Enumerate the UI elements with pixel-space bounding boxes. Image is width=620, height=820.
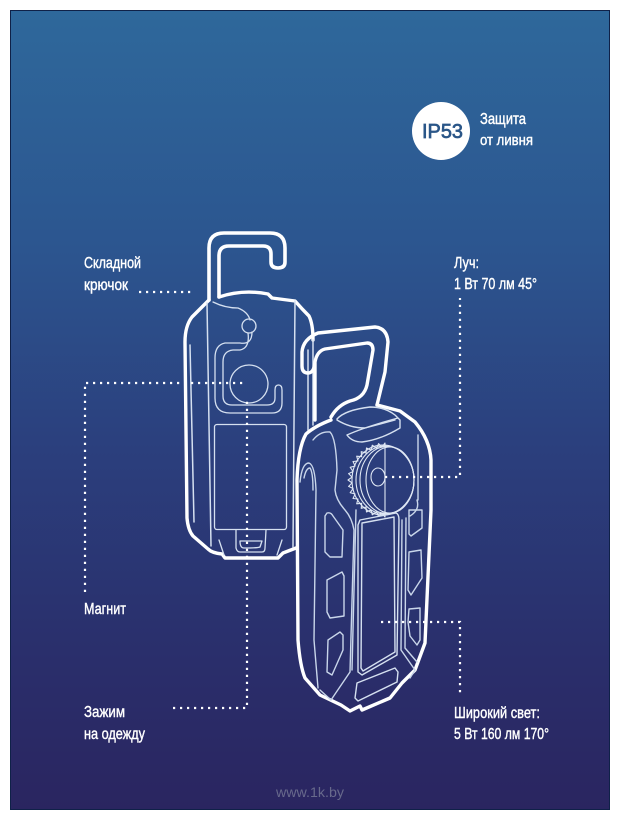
hook: front device: [302, 327, 388, 420]
callout: hook: Складной: [84, 255, 141, 272]
folded hook: rear device: [213, 302, 282, 413]
callout: beam: Луч:: [454, 255, 479, 272]
battery panel: rear device: [214, 424, 286, 530]
top cap: front device: [337, 407, 400, 442]
callout: wide light: Широкий свет:: [454, 705, 540, 722]
body outline: front device: [297, 405, 431, 711]
callout: beam: 1 Вт 70 лм 45°: [454, 276, 537, 293]
callout: magnet: Магнит: [84, 601, 127, 618]
badge label: IP53: [422, 121, 463, 143]
side grips: left: [325, 513, 344, 675]
badge: IP53: [412, 102, 470, 160]
label: rain protection: Защита: [480, 111, 526, 128]
knob rings: [366, 447, 414, 513]
bottom plate: [355, 668, 398, 701]
wide-light panel: [358, 513, 399, 675]
callout: clip: Зажим: [84, 704, 125, 721]
label: rain protection: [480, 111, 533, 149]
body contour lines: front device: [300, 432, 418, 700]
lens: [371, 468, 385, 486]
device: rear view: [185, 233, 313, 558]
callout: beam: [385, 255, 537, 477]
knob teeth: [348, 443, 385, 517]
body outline: rear device: [185, 292, 313, 558]
hook: rear device: [209, 233, 285, 300]
clip: rear device: [219, 530, 282, 555]
callout: hook: [84, 255, 193, 294]
callout: hook: крючок: [84, 277, 129, 294]
badge circle: [412, 102, 470, 160]
label: rain protection: от ливня: [480, 132, 533, 149]
callout: clip: [84, 400, 247, 743]
callout: magnet: [84, 383, 247, 618]
callout: clip: на одежду: [84, 726, 145, 743]
callout: wide light: [381, 622, 549, 743]
watermark: www.1k.by: [275, 784, 344, 800]
magnet circle: [230, 365, 268, 403]
side grips: right: [408, 510, 422, 645]
callout: wide light: 5 Вт 160 лм 170°: [454, 726, 549, 743]
lens knob: [348, 443, 414, 517]
device: front view: [297, 327, 431, 711]
body side lines: rear device: [190, 301, 313, 547]
